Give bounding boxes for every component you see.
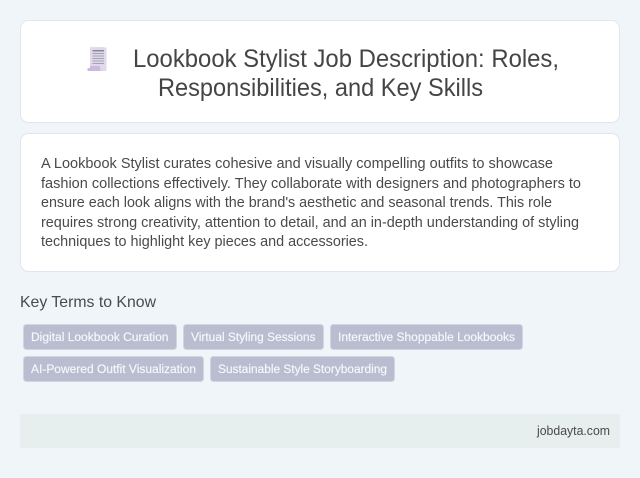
title (133, 45, 559, 102)
footer (20, 414, 620, 448)
tag: ai-powered outfit visualization (24, 356, 204, 382)
heading: key terms: Key Terms to Know (20, 294, 156, 311)
tag: interactive shoppable lookbooks: Interactive Shoppable Lookbooks (338, 330, 515, 344)
title: Lookbook Stylist Job Description: Roles, (133, 45, 559, 73)
footer: jobdayta.com (536, 424, 610, 438)
icon: document scroll (87, 47, 106, 71)
tag: virtual styling sessions (184, 324, 324, 350)
text block: description: fashion collections effectively. They collaborate with designers and photographers to (41, 176, 581, 192)
tag: interactive shoppable lookbooks (330, 324, 522, 350)
tag: digital lookbook curation (24, 324, 176, 350)
tag: sustainable style storyboarding: Sustainable Style Storyboarding (218, 362, 387, 376)
text block: description: A Lookbook Stylist curates cohesive and visually compelling outfits to showcase (41, 156, 553, 172)
tag: ai-powered outfit visualization: AI-Powered Outfit Visualization (31, 362, 196, 376)
tag: virtual styling sessions: Virtual Styling Sessions (191, 330, 316, 344)
text block: description (41, 156, 581, 250)
title: Responsibilities, and Key Skills (158, 74, 483, 102)
tags: key terms (24, 324, 522, 382)
tag: digital lookbook curation: Digital Lookbook Curation (31, 330, 169, 344)
panel: description card (20, 134, 620, 272)
text block: description: ensure each look aligns with the brand's aesthetic and seasonal trends. This role (41, 195, 552, 211)
text block: description: requires strong creativity, attention to detail, and an in-depth understanding of styling (41, 215, 579, 231)
tag: sustainable style storyboarding (210, 356, 394, 382)
text block: description: techniques to highlight key pieces and accessories. (41, 234, 368, 250)
panel: title card (20, 20, 620, 122)
